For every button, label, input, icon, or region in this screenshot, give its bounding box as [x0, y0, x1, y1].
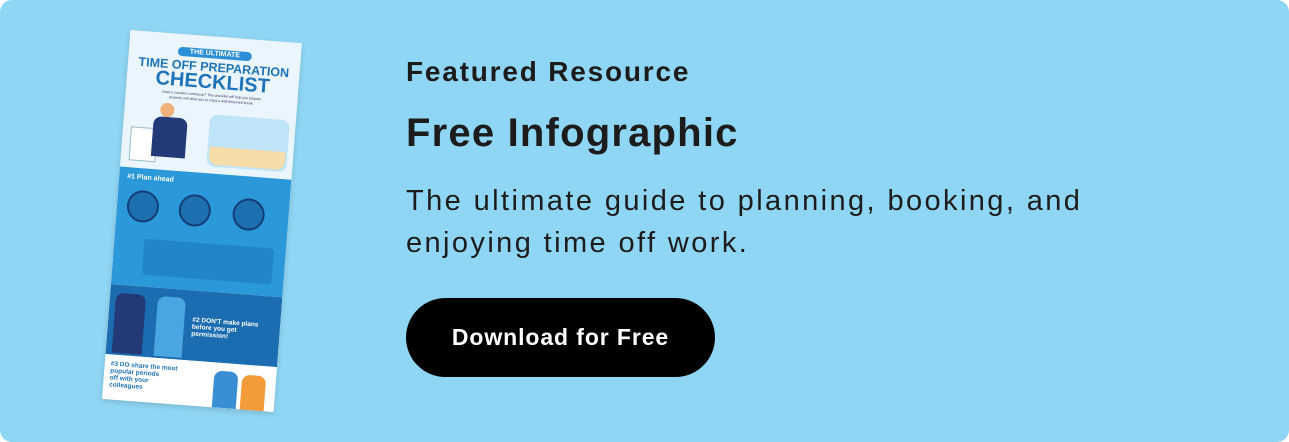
description: The ultimate guide to planning, booking, and: [406, 185, 1082, 217]
illustration: businessman and beach: [128, 103, 290, 172]
thumb title: THE ULTIMATE: [189, 49, 240, 59]
description: [406, 185, 1082, 259]
thumb title: [138, 47, 290, 106]
download button: Download for Free: [452, 324, 669, 350]
thumb title: TIME OFF PREPARATION: [138, 55, 290, 80]
section 2: don't make plans: permission!: [191, 331, 228, 340]
section 1: plan ahead: [111, 167, 291, 297]
section 2: don't make plans: [106, 284, 282, 367]
section 2: don't make plans: #2 DON'T make plans: [192, 317, 259, 329]
main heading: Free Infographic: [406, 111, 739, 155]
section 3: share popular periods: colleagues: [109, 381, 143, 391]
section 3: share popular periods: popular periods: [110, 367, 159, 378]
section 3: share popular periods: [102, 354, 277, 412]
thumb title: CHECKLIST: [155, 67, 271, 98]
description: enjoying time off work.: [406, 227, 749, 259]
section 2: don't make plans: before you get: [192, 324, 237, 334]
section 3: share popular periods: off with your: [109, 374, 149, 384]
thumb title: properly and allow you to enjoy a well-deserved break.: [169, 95, 254, 106]
download button: [406, 298, 715, 377]
infographic thumbnail: [102, 30, 302, 412]
section 1: plan ahead: #1 Plan ahead: [127, 173, 174, 184]
section 3: share popular periods: #3 DO share the most: [110, 360, 178, 373]
thumb title: Have a vacation coming up? This checklist will help you prepare: [162, 90, 261, 101]
eyebrow heading: Featured Resource: [406, 56, 690, 87]
